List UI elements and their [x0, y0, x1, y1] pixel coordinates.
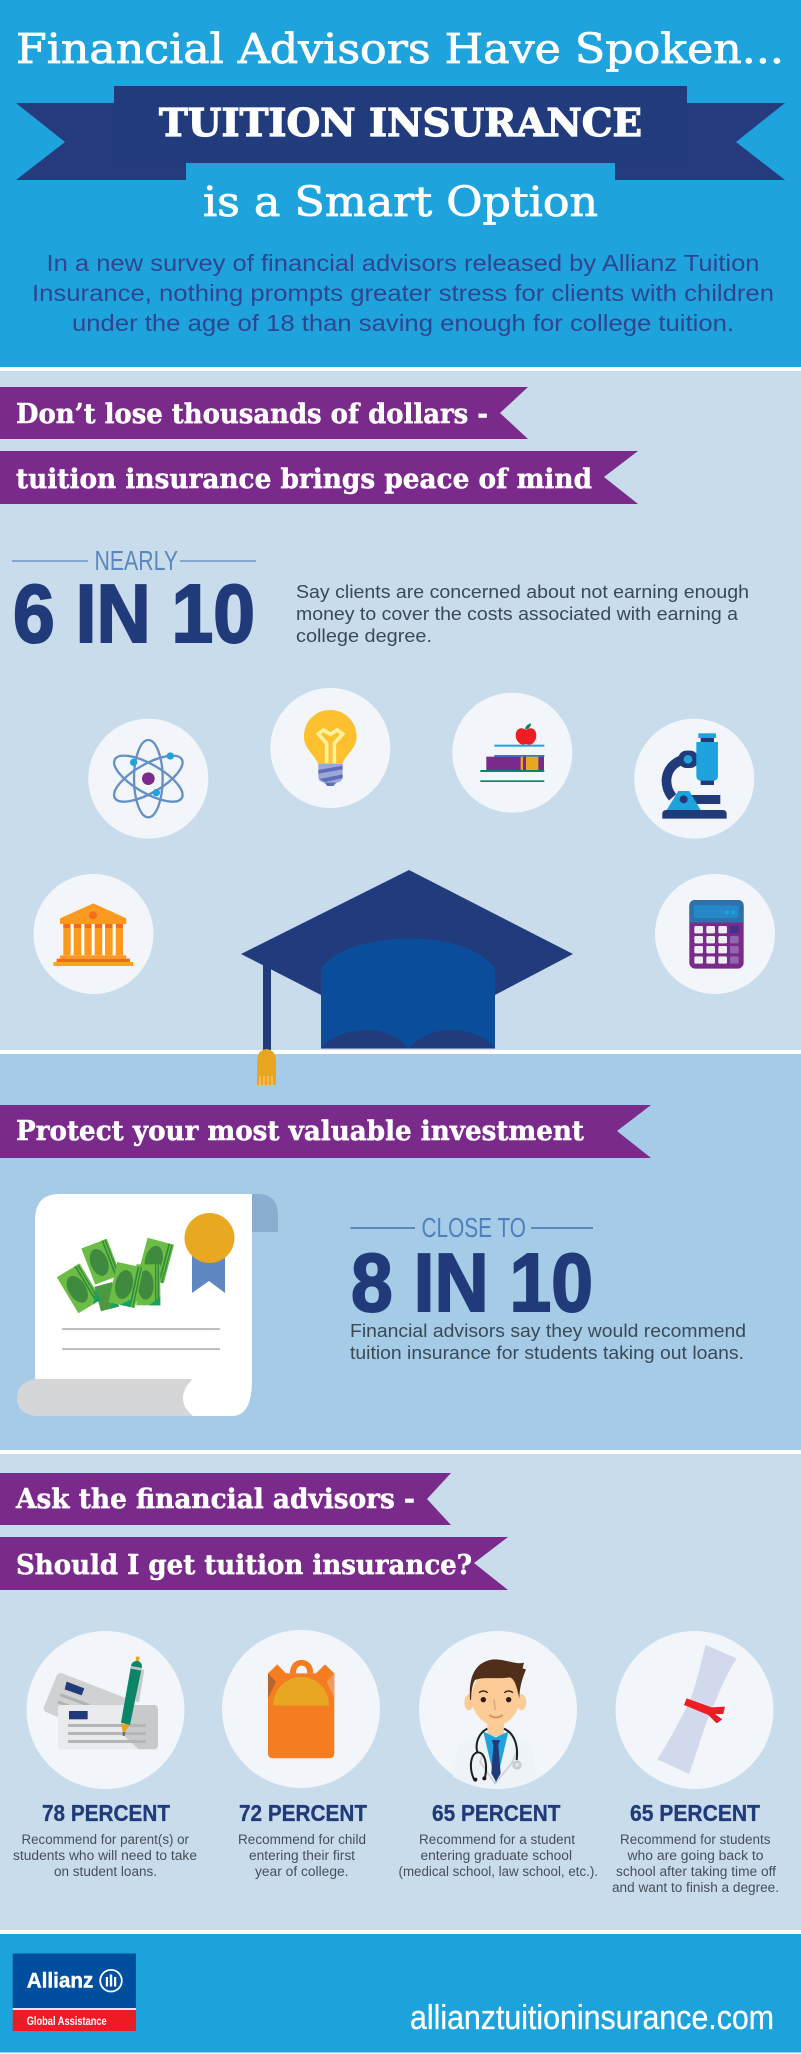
ribbon: should I get tuition insurance: Should I get tuition insurance? [16, 1550, 472, 1581]
ribbon: should I get tuition insurance [0, 1537, 508, 1590]
icon: money bills [57, 1238, 174, 1313]
ribbon: protect investment [0, 1105, 651, 1158]
stat: 78 percent: students who will need to take [13, 1848, 197, 1863]
stat description: Financial advisors say they would recommend [350, 1321, 746, 1341]
icon: certificate scroll [17, 1194, 278, 1416]
ribbon: peace of mind [0, 451, 638, 504]
stat: 65 percent graduate: Recommend for a student [419, 1832, 575, 1847]
intro paragraph: Insurance, nothing prompts greater stress for clients with children [32, 280, 774, 306]
logo: Allianz Global Assistance: Allianz [27, 1970, 93, 1992]
stat: 65 percent returning: who are going back to [626, 1848, 764, 1863]
stat: nearly 6 in 10: 6 IN 10 [13, 567, 255, 660]
stat description: money to cover the costs associated with earning a [296, 604, 739, 624]
icon: medal [184, 1213, 234, 1293]
stat: 72 percent: Recommend for child [238, 1832, 366, 1847]
stat: 65 percent returning [612, 1800, 779, 1895]
ribbon: don't lose thousands [0, 387, 528, 439]
stat: nearly 6 in 10: NEARLY [94, 545, 178, 576]
intro paragraph: under the age of 18 than saving enough for college tuition. [72, 310, 734, 336]
icon: diploma [616, 1631, 774, 1789]
stat: 65 percent returning: and want to finish a degree. [612, 1880, 779, 1895]
icon: calculator [655, 874, 775, 994]
ribbon: don't lose thousands: Don’t lose thousands of dollars - [16, 399, 488, 430]
icon: books and apple [452, 693, 572, 813]
stat: 65 percent graduate: 65 PERCENT [432, 1800, 560, 1826]
banner: tuition insurance: TUITION INSURANCE [159, 100, 642, 145]
stat: 78 percent [13, 1800, 197, 1879]
ribbon: peace of mind: tuition insurance brings peace of mind [16, 464, 592, 495]
icon: bank building [34, 874, 154, 994]
subtitle: is a Smart Option [203, 178, 598, 226]
stat: 65 percent graduate: entering graduate school [420, 1848, 572, 1863]
ribbon: ask the financial advisors [0, 1473, 451, 1525]
stat: 65 percent graduate: (medical school, law school, etc.). [398, 1864, 598, 1879]
panel: footer [0, 1934, 801, 2052]
stat: 65 percent returning: school after taking time off [616, 1864, 776, 1879]
icon: microscope [634, 719, 754, 839]
panel: header [0, 0, 801, 367]
stat: close to 8 in 10: 8 IN 10 [351, 1236, 593, 1329]
intro paragraph: In a new survey of financial advisors released by Allianz Tuition [46, 250, 760, 276]
white divider band [0, 1050, 801, 1054]
icon: doctor [419, 1631, 577, 1793]
stat: 72 percent: entering their first [249, 1848, 355, 1863]
stat description: college degree. [296, 626, 432, 646]
logo: Allianz Global Assistance: Global Assistance [27, 2016, 107, 2028]
icon: light bulb [270, 688, 390, 808]
panel: investment section [0, 1054, 801, 1450]
ribbon: ask the financial advisors: Ask the financial advisors - [15, 1484, 415, 1515]
stat description [296, 582, 749, 646]
ribbon: protect investment: Protect your most valuable investment [16, 1116, 585, 1147]
banner: tuition insurance [16, 86, 785, 180]
graduation cap [241, 870, 573, 1085]
stat: 65 percent graduate [398, 1800, 598, 1879]
stat: 78 percent: Recommend for parent(s) or [22, 1832, 189, 1847]
stat: 72 percent: year of college. [255, 1864, 348, 1879]
stat: 72 percent [238, 1800, 367, 1879]
stat description: Say clients are concerned about not earning enough [296, 582, 749, 602]
stat description: tuition insurance for students taking out loans. [350, 1343, 744, 1363]
white divider band [0, 1450, 801, 1454]
stat: close to 8 in 10: CLOSE TO [422, 1212, 526, 1243]
panel: ask the advisors section [0, 1454, 801, 1930]
icon: checks and pen [26, 1631, 184, 1789]
panel: peace of mind section [0, 371, 801, 1050]
intro paragraph [32, 250, 774, 336]
icon: atom [88, 719, 208, 839]
stat: 78 percent: on student loans. [54, 1864, 157, 1879]
white divider band [0, 1930, 801, 1934]
stat: 78 percent: 78 PERCENT [42, 1800, 170, 1826]
stat: 65 percent returning: Recommend for students [620, 1832, 771, 1847]
icon: backpack [222, 1630, 380, 1788]
logo: Allianz Global Assistance [13, 1954, 136, 2031]
stat: 65 percent returning: 65 PERCENT [630, 1800, 760, 1826]
title line 1: Financial Advisors Have Spoken... [16, 25, 784, 73]
stat description [350, 1321, 746, 1363]
stat: 72 percent: 72 PERCENT [239, 1800, 367, 1826]
